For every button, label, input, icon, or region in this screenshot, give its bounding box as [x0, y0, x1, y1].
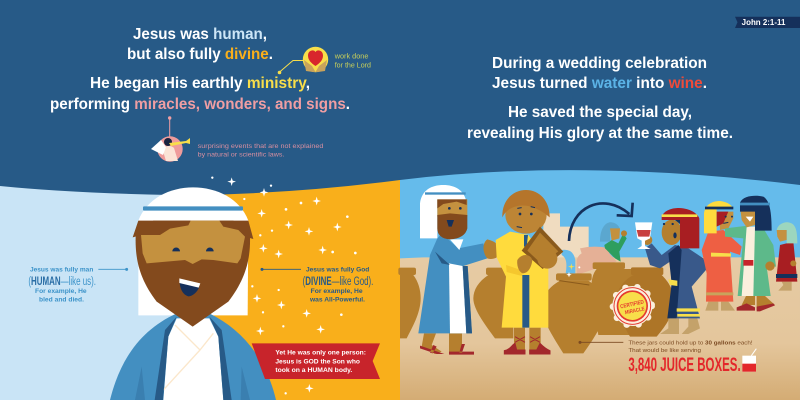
- heading: water into wine: Jesus turned water into wine.: [492, 75, 707, 92]
- figures: guests group: [600, 196, 797, 334]
- heading: human and divine: [50, 26, 350, 113]
- annotation: juice boxes: That would be like serving: [628, 348, 701, 354]
- arrow: water to wine: [569, 203, 633, 241]
- figure: Jesus portrait: [110, 187, 276, 400]
- annotation: juice boxes: These jars could hold up to 30 gallons each!: [628, 341, 753, 347]
- callout: miracles: surprising events that are not explained: [198, 143, 324, 150]
- panel: wedding scene sky: [400, 170, 800, 400]
- heading: human and divine: Jesus was human,: [133, 26, 267, 43]
- banner: one person: took on a HUMAN body.: [275, 368, 353, 374]
- callout: ministry: for the Lord: [335, 60, 371, 69]
- heading: human and divine: but also fully divine.: [127, 46, 273, 63]
- jars: [398, 247, 674, 353]
- icon: juice box: [742, 349, 756, 372]
- background buildings: [543, 213, 589, 260]
- annotation: fully man: (HUMAN—like us).: [28, 274, 96, 288]
- figure: small child: [776, 222, 797, 291]
- heading: water into wine: During a wedding celebration: [492, 55, 707, 72]
- panel: human side background: [0, 186, 200, 400]
- seal: certified miracle: MIRACLE: [624, 306, 646, 316]
- annotation: fully God: Jesus was fully God: [306, 267, 370, 273]
- water pouring: [562, 250, 580, 277]
- callout: miracles: [151, 116, 324, 162]
- annotation: fully God: was All-Powerful.: [309, 298, 365, 304]
- annotation: fully man: bled and died.: [39, 298, 84, 304]
- icon: wine glass: [635, 222, 652, 249]
- heading: water into wine: revealing His glory at the same time.: [467, 125, 733, 142]
- banner: one person: Yet He was only one person:: [275, 350, 366, 356]
- scripture tag: [735, 17, 800, 28]
- left page illustration: [28, 176, 380, 400]
- banner: one person: [252, 343, 380, 379]
- sparkles: [211, 176, 357, 394]
- heading: human and divine: performing miracles, wonders, and signs.: [50, 96, 350, 113]
- heading: human and divine: He began His earthly ministry,: [90, 75, 310, 92]
- figure: servant pouring: [496, 190, 563, 354]
- seal: certified miracle: [613, 287, 652, 325]
- icon: angel with trumpet: [151, 136, 190, 162]
- annotation: fully man: Jesus was fully man: [30, 267, 94, 273]
- callout: ministry: work done: [334, 52, 368, 61]
- heading: water into wine: He saved the special day,: [508, 104, 692, 121]
- annotation: juice boxes: [578, 341, 756, 376]
- heading: water into wine: [467, 55, 733, 142]
- annotation: fully God: [260, 267, 373, 304]
- panel: divine side background: [200, 180, 400, 400]
- banner: one person: Jesus is GOD the Son who: [275, 360, 360, 366]
- annotation: fully man: For example, He: [35, 289, 87, 295]
- callout: ministry: [278, 47, 371, 74]
- icon: heart in hands: [303, 47, 328, 72]
- figure: man with glass: [635, 208, 707, 334]
- annotation: fully God: (DIVINE—like God).: [303, 274, 373, 288]
- annotation: fully God: For example, He: [311, 289, 363, 295]
- seal: certified miracle: CERTIFIED: [620, 300, 645, 310]
- right page illustration: [398, 185, 800, 400]
- annotation: fully man: [28, 267, 128, 304]
- callout: miracles: by natural or scientific laws.: [198, 152, 285, 159]
- figure: Jesus: [418, 185, 500, 355]
- scripture tag: John 2:1-11: [742, 18, 786, 27]
- figure: man in green: [725, 196, 776, 311]
- figure: woman in orange: [702, 201, 742, 311]
- ground: [400, 257, 800, 400]
- figure: child in green: [600, 222, 627, 262]
